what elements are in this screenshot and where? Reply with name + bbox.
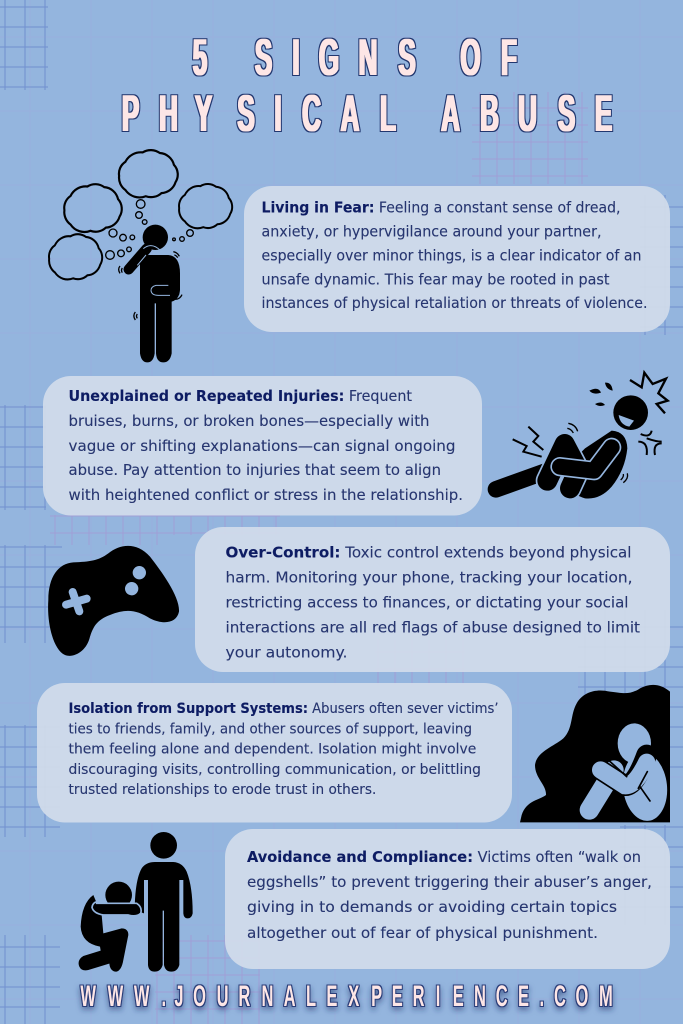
text: unexplained injuries: vague or shifting explanations—can signal ongoing: [68, 437, 456, 455]
icon: person curled in shadow: [520, 685, 670, 823]
panel: over-control: [195, 527, 670, 672]
text: living in fear: unsafe dynamic. This fear may be rooted in past: [262, 270, 610, 288]
icon: injured person holding knee: [496, 373, 668, 499]
text: isolation: ties to friends, family, and other sources of support, leaving: [68, 722, 472, 738]
text: over-control: harm. Monitoring your phone, tracking your location,: [226, 569, 632, 587]
text: living in fear: instances of physical retaliation or threats of violence.: [262, 294, 648, 312]
panel: isolation: [37, 683, 512, 822]
text: avoidance and compliance: [247, 848, 652, 942]
text: avoidance and compliance: Avoidance and Compliance: Victims often “walk on: [247, 848, 641, 866]
text: unexplained injuries: bruises, burns, or broken bones—especially with: [68, 412, 430, 430]
text: avoidance and compliance: altogether out of fear of physical punishment.: [247, 924, 598, 942]
title: PHYSICALABUSE: [122, 84, 612, 142]
text: over-control: your autonomy.: [226, 644, 348, 662]
icon: game controller: [48, 546, 179, 656]
text: unexplained injuries: abuse. Pay attention to injuries that seem to align: [68, 461, 441, 479]
text: living in fear: [262, 198, 648, 312]
footer url: WWW.JOURNALEXPERIENCE.COM: [80, 980, 613, 1013]
icon: kneeling person and standing person: [79, 832, 193, 972]
text: unexplained injuries: with heightened conflict or stress in the relationship.: [68, 486, 463, 504]
panel: avoidance and compliance: [225, 829, 670, 969]
title: [122, 28, 612, 142]
panel: living in fear: [244, 186, 670, 332]
text: avoidance and compliance: giving in to demands or avoiding certain topics: [247, 898, 617, 916]
text: living in fear: especially over minor things, is a clear indicator of an: [262, 246, 642, 264]
text: isolation: [68, 701, 498, 798]
icon: anxious person with thought clouds: [49, 150, 232, 362]
text: avoidance and compliance: eggshells” to prevent triggering their abuser’s anger,: [247, 873, 652, 891]
text: living in fear: Living in Fear: Feeling a constant sense of dread,: [262, 198, 620, 216]
text: over-control: interactions are all red flags of abuse designed to limit: [226, 619, 640, 637]
text: isolation: Isolation from Support Systems: Abusers often sever victims’: [68, 701, 498, 717]
text: unexplained injuries: Unexplained or Repeated Injuries: Frequent: [68, 387, 412, 405]
text: over-control: Over-Control: Toxic control extends beyond physical: [226, 544, 632, 562]
text: living in fear: anxiety, or hypervigilance around your partner,: [262, 222, 602, 240]
title: 5SIGNSOF: [193, 28, 517, 86]
text: isolation: discouraging visits, controlling communication, or belittling: [68, 762, 481, 778]
text: isolation: them feeling alone and dependent. Isolation might involve: [68, 742, 476, 758]
text: isolation: trusted relationships to erode trust in others.: [68, 782, 376, 798]
text: over-control: [226, 544, 640, 662]
text: over-control: restricting access to finances, or dictating your social: [226, 594, 628, 612]
text: unexplained injuries: [68, 387, 463, 504]
panel: unexplained injuries: [43, 376, 482, 516]
